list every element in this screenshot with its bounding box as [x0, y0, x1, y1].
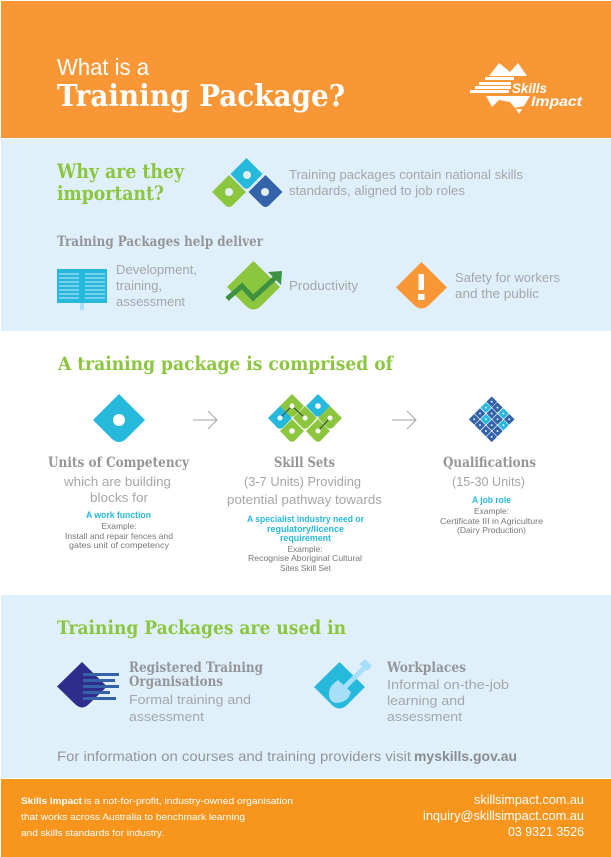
label: units of competency	[48, 455, 190, 505]
text: development, training, assessment: training,	[116, 278, 162, 293]
text: more information: For information on courses and training providers visit	[57, 748, 411, 764]
icon: registered training organisations	[57, 662, 119, 708]
column: skill sets	[227, 394, 383, 573]
text: about Skills Impact: that works across Australia to benchmark learning	[21, 812, 245, 823]
text: about Skills Impact: Skills Impact	[21, 796, 83, 807]
text: job role example: Certificate III in Agriculture	[440, 516, 543, 526]
label: skill sets: (3-7 Units) Providing	[244, 474, 361, 489]
label: units of competency: which are building	[63, 474, 171, 489]
text: specialist need example: requirement	[280, 533, 331, 543]
label: qualifications: Qualifications	[443, 455, 536, 471]
text: about Skills Impact: and skills standards for industry.	[21, 828, 164, 839]
text: registered training organisations: Organisations	[129, 674, 223, 690]
text: registered training organisations	[129, 660, 263, 724]
text: national skills standards	[289, 167, 523, 198]
label: skill sets: Skill Sets	[274, 455, 335, 471]
text: registered training organisations: Registered Training	[129, 660, 263, 676]
icon: warning	[396, 262, 447, 308]
text: job role example	[440, 495, 543, 535]
text: national skills standards: standards, aligned to job roles	[289, 183, 465, 198]
text: work function example: Install and repair fences and	[65, 531, 173, 541]
text: specialist need example: A specialist industry need or	[247, 514, 364, 524]
subheading: help deliver: Training Packages help deliver	[57, 234, 264, 250]
text: safety: Safety for workers	[455, 270, 560, 285]
text: specialist need example: Sites Skill Set	[280, 563, 332, 573]
text: specialist need example: Example:	[288, 544, 322, 554]
panel: header	[1, 1, 611, 138]
panel: why important	[1, 139, 611, 331]
label: qualifications: (15-30 Units)	[452, 474, 525, 489]
title	[57, 54, 345, 114]
text: job role example: A job role	[472, 495, 511, 505]
panel: used in	[1, 595, 611, 778]
icon: skill set diamonds	[268, 394, 342, 442]
arrow	[193, 411, 217, 429]
icon: qualification diamonds	[469, 396, 515, 442]
text: productivity: Productivity	[289, 278, 358, 293]
logo: Skills Impact	[470, 63, 584, 114]
label: skill sets	[227, 455, 383, 507]
text: development, training, assessment	[116, 262, 197, 309]
column: qualifications	[440, 396, 543, 535]
panel: footer	[1, 779, 611, 857]
label: skill sets: potential pathway towards	[227, 492, 383, 507]
heading: comprised of: A training package is comprised of	[57, 353, 395, 375]
text: about Skills Impact: is a not-for-profit, industry-owned organisation	[84, 796, 293, 807]
title: Training Package?	[57, 79, 345, 114]
title: What is a	[57, 54, 149, 80]
arrow	[392, 411, 416, 429]
text: contact details: inquiry@skillsimpact.com.au	[423, 808, 584, 823]
panel: comprised of	[1, 332, 611, 595]
text: specialist need example	[247, 514, 364, 573]
text: safety: and the public	[455, 286, 540, 301]
text: development, training, assessment: Development,	[116, 262, 197, 277]
text: registered training organisations: assessment	[129, 709, 204, 724]
label: units of competency: Units of Competency	[48, 455, 190, 471]
text: contact details: 03 9321 3526	[508, 824, 584, 839]
text: workplaces: Informal on-the-job	[387, 677, 509, 692]
column: units of competency	[48, 394, 190, 550]
text: specialist need example: Recognise Aboriginal Cultural	[248, 553, 362, 563]
icon: single diamond	[93, 394, 145, 442]
text: work function example: gates unit of competency	[69, 540, 170, 550]
text: workplaces: assessment	[387, 709, 462, 724]
text: registered training organisations: Formal training and	[129, 692, 251, 707]
icon: productivity chart	[227, 261, 282, 310]
label: units of competency: blocks for	[90, 490, 149, 505]
icon: three diamonds	[212, 158, 282, 207]
text: contact details	[423, 792, 584, 839]
text: workplaces: Workplaces	[386, 660, 466, 676]
text: development, training, assessment: assessment	[116, 294, 185, 309]
heading: why are they important: important?	[57, 181, 164, 205]
text: job role example: (Dairy Production)	[457, 525, 526, 535]
text: workplaces	[386, 660, 509, 724]
logo: Skills Impact: Impact	[531, 93, 584, 109]
label: qualifications	[443, 455, 536, 489]
text: contact details: skillsimpact.com.au	[474, 792, 584, 807]
text: workplaces: learning and	[387, 693, 465, 708]
text: safety	[455, 270, 560, 301]
text: work function example: A work function	[86, 510, 151, 520]
heading: why are they important	[56, 159, 185, 205]
icon: workplaces shovel	[314, 659, 372, 708]
text: specialist need example: regulatory/licence	[267, 524, 344, 534]
text: work function example: Example:	[102, 521, 136, 531]
text: more information: myskills.gov.au	[414, 748, 517, 764]
text: work function example	[65, 510, 173, 550]
heading: used in: Training Packages are used in	[57, 617, 346, 639]
text: job role example: Example:	[474, 506, 509, 516]
text: about Skills Impact	[21, 796, 293, 839]
heading: why are they important: Why are they	[56, 159, 185, 183]
text: national skills standards: Training packages contain national skills	[289, 167, 523, 182]
logo: Skills Impact: Skills	[512, 80, 547, 96]
icon: book	[57, 269, 107, 311]
